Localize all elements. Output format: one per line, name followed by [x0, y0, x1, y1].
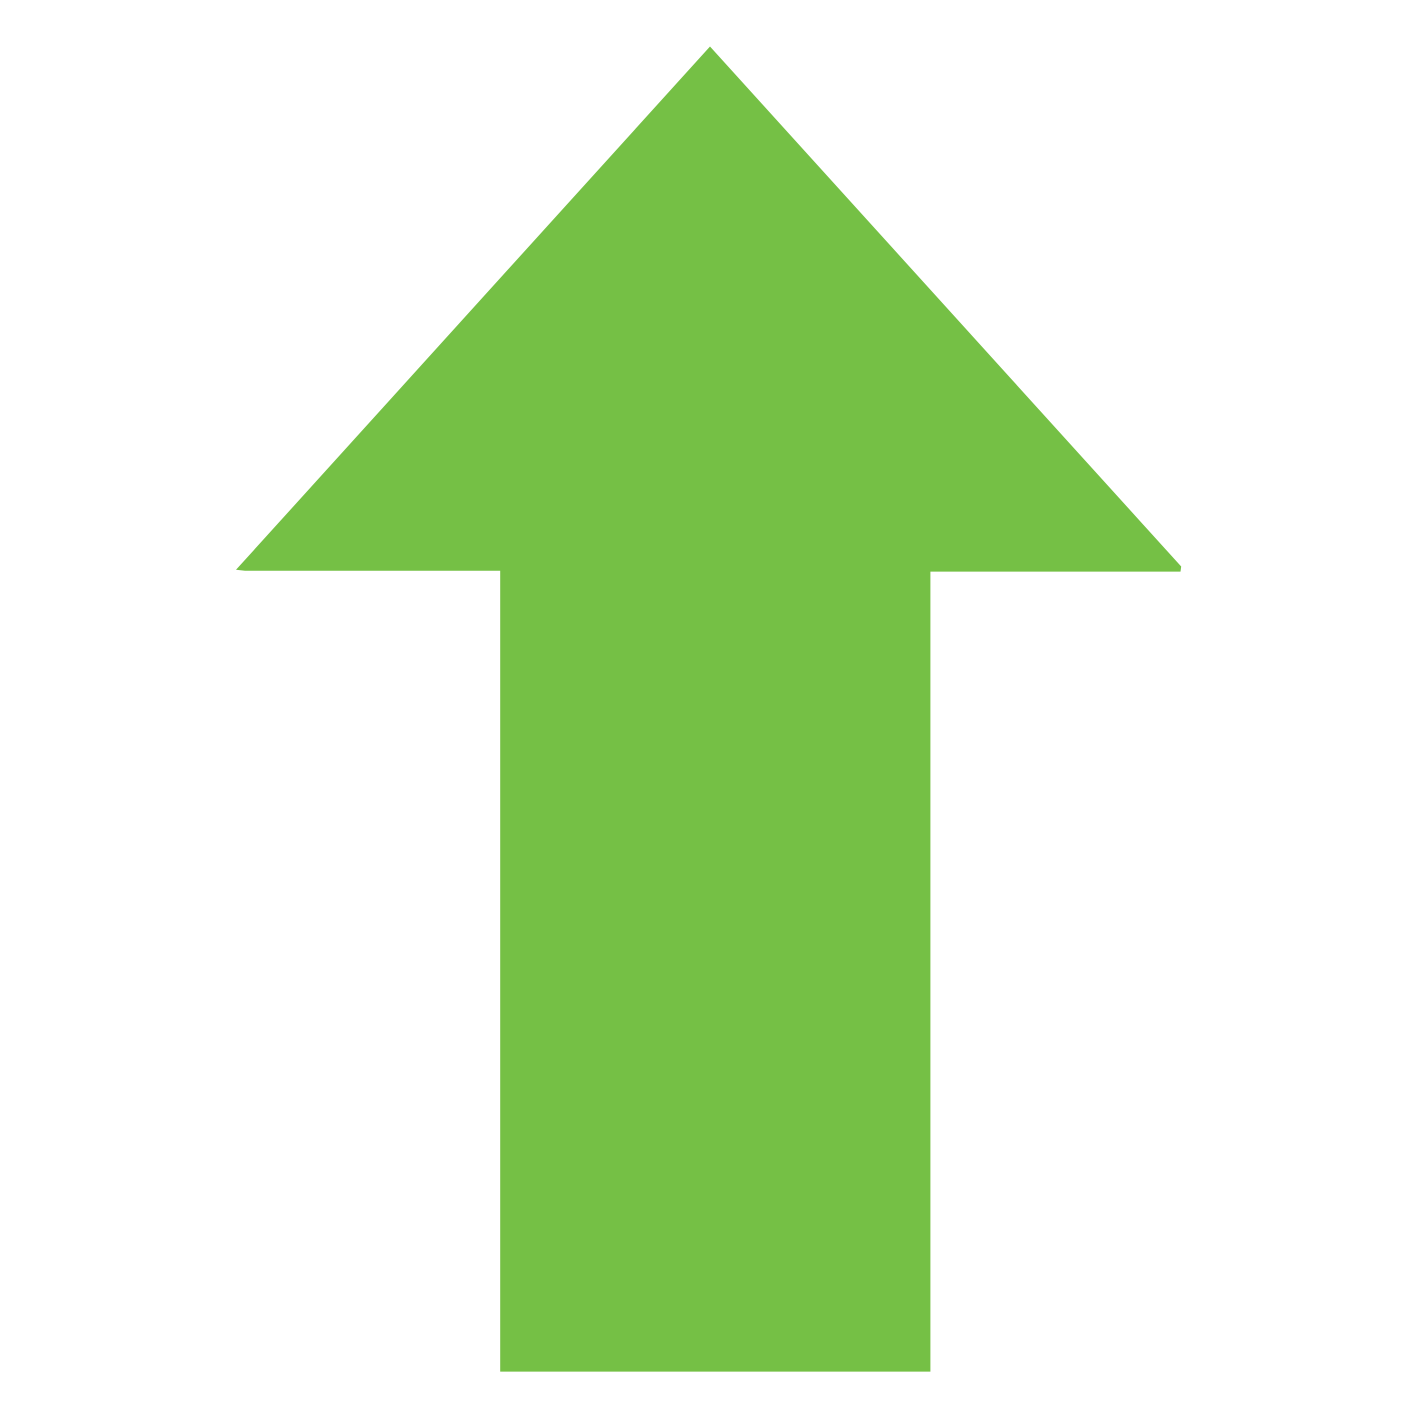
icon: green up arrow	[236, 46, 1181, 1372]
